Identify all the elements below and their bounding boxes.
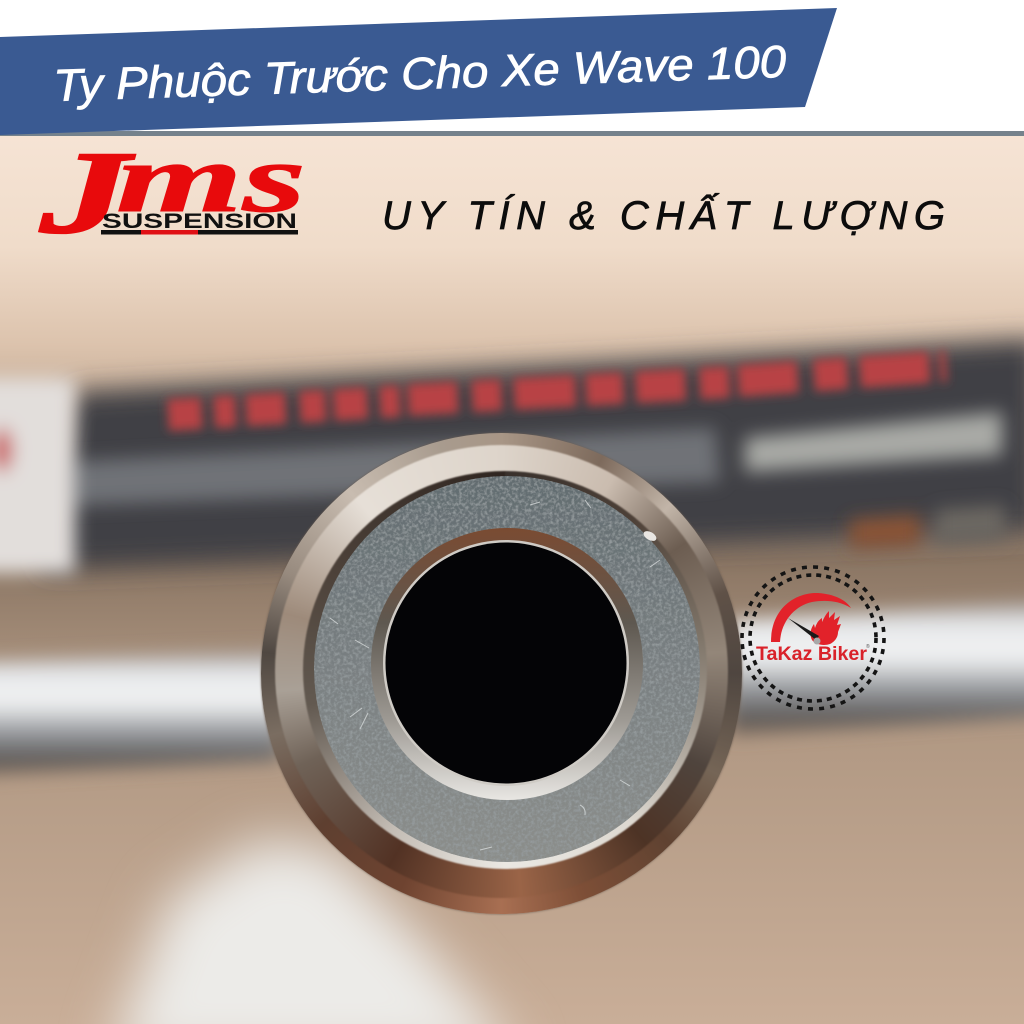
rod end: outer metal cap: [261, 433, 742, 914]
blue title ribbon: [0, 8, 837, 135]
central hole: [386, 542, 626, 784]
blurred red lettering on the box: [168, 366, 946, 415]
flame: [811, 611, 841, 645]
bright rim highlight: [275, 445, 728, 898]
blurred chrome rod right: [730, 600, 1024, 735]
SUSPENSION wordmark: SUSPENSION: [102, 210, 297, 233]
small dent on rim: [642, 529, 658, 543]
logo letter J: J: [38, 127, 136, 258]
laurel ring of leaves: [742, 567, 884, 709]
washer scratches: [330, 500, 660, 850]
hole collar: [371, 528, 643, 800]
badge wordmark: TaKaz Biker: [756, 643, 867, 665]
title text: Ty Phuộc Trước Cho Xe Wave 100: [53, 36, 787, 111]
logo underline: [101, 230, 298, 234]
gauge arc: [771, 593, 851, 642]
slogan: UY TÍN & CHẤT LƯỢNG: [382, 192, 945, 238]
inner lip shadow: [303, 471, 707, 869]
blurred white glove: [110, 840, 520, 1024]
logo letters ms: ms: [116, 125, 306, 233]
registered mark: ®: [866, 643, 870, 650]
blurred box light label bands: [60, 412, 1005, 548]
grey rule under header: [0, 131, 1024, 136]
blurred box: [40, 338, 1024, 570]
gauge needle: [788, 618, 820, 644]
blurred chrome rod left: [0, 650, 280, 775]
blurred white packaging at left edge: [0, 378, 75, 573]
